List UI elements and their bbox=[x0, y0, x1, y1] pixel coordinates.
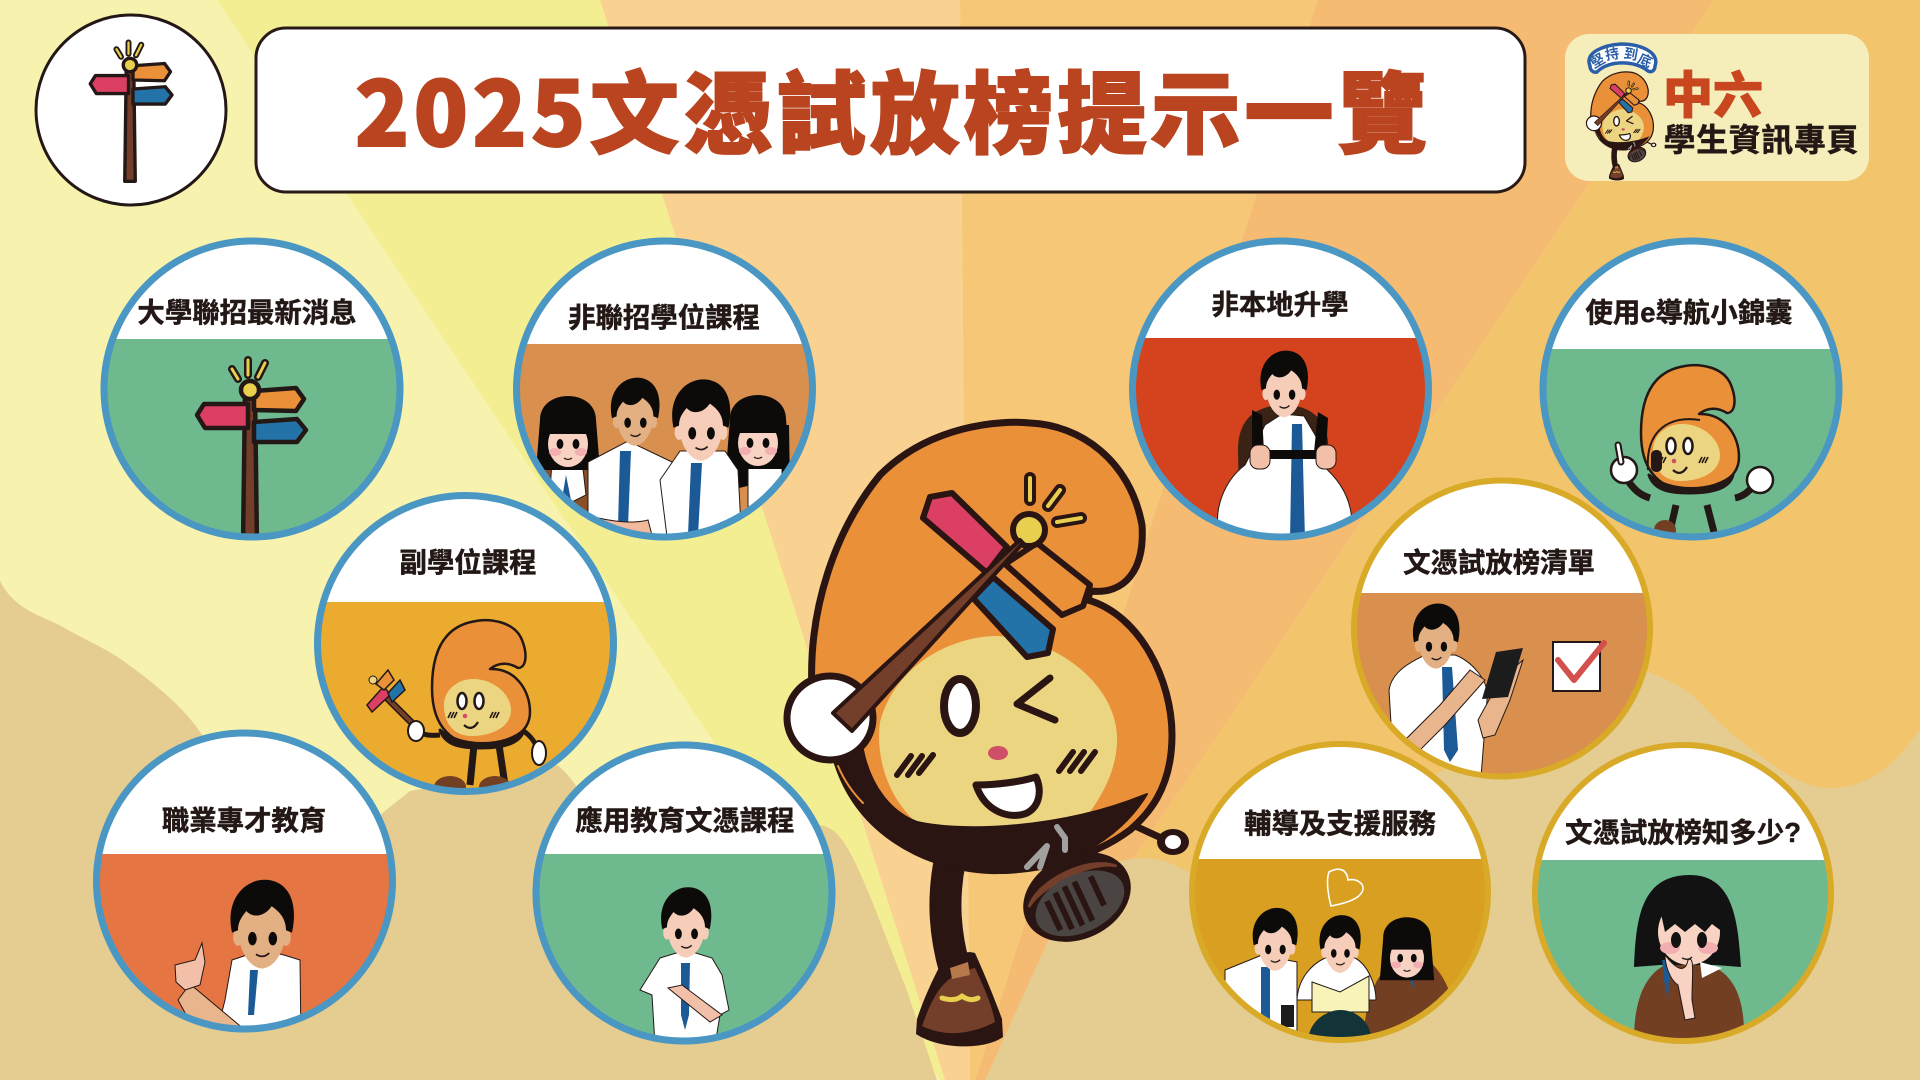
badge: 堅持到底: 持 bbox=[1604, 43, 1621, 65]
panel: 文憑試放榜清單 bbox=[1351, 478, 1653, 780]
heading: 非本地升學 bbox=[1212, 289, 1348, 320]
icon: signpost badge bbox=[36, 15, 226, 205]
panel: 應用教育文憑課程 bbox=[525, 745, 855, 1054]
heading: 副學位課程 bbox=[400, 547, 536, 578]
icon: checkbox bbox=[1553, 642, 1604, 691]
figure: mascot with headset bbox=[1611, 365, 1773, 540]
panel: 職業專才教育 bbox=[93, 730, 396, 1032]
icon: heart bbox=[1328, 869, 1363, 906]
heading: 文憑試放榜清單 bbox=[1403, 547, 1595, 578]
panel: 輔導及支援服務 bbox=[1185, 744, 1515, 1049]
figure: student with hand on chest bbox=[640, 887, 729, 1045]
panel: 非聯招學位課程 bbox=[513, 238, 816, 540]
figure: mascot with signpost bbox=[367, 620, 546, 798]
heading: 應用教育文憑課程 bbox=[575, 805, 795, 836]
badge: 堅持到底: 堅 bbox=[1586, 49, 1609, 73]
logo panel: 中六學生資訊專頁 bbox=[1565, 34, 1869, 181]
panel: 副學位課程 bbox=[310, 496, 640, 802]
mascot: orange character with signpost bbox=[787, 422, 1189, 1046]
heading: 職業專才教育 bbox=[162, 805, 326, 836]
panel: 文憑試放榜知多少? bbox=[1525, 745, 1855, 1050]
figure: student thumbs up bbox=[175, 880, 301, 1040]
figure: four students bbox=[536, 378, 790, 545]
heading: 大學聯招最新消息 bbox=[137, 297, 357, 328]
中六: 中六 bbox=[1663, 56, 1763, 128]
heading: 非聯招學位課程 bbox=[568, 302, 760, 333]
heading: 輔導及支援服務 bbox=[1244, 808, 1436, 839]
badge: 堅持到底: 到 bbox=[1622, 43, 1639, 65]
panel: 使用e導航小錦囊 bbox=[1530, 241, 1860, 549]
figure: student with backpack bbox=[1218, 351, 1352, 540]
panel: 大學聯招最新消息 bbox=[90, 241, 420, 549]
figure: student with tablet bbox=[1389, 604, 1523, 790]
figure: thinking girl bbox=[1634, 875, 1744, 1040]
heading: 使用e導航小錦囊 bbox=[1586, 297, 1792, 328]
學生資訊專頁: 學生資訊專頁 bbox=[1664, 115, 1858, 161]
badge: 堅持到底 bbox=[1586, 43, 1656, 73]
heading: 文憑試放榜知多少? bbox=[1565, 817, 1801, 848]
title banner bbox=[256, 28, 1525, 192]
panel: 非本地升學 bbox=[1120, 241, 1450, 548]
badge: 堅持到底: 底 bbox=[1635, 48, 1656, 72]
title: 2025文憑試放榜提示一覽 bbox=[355, 43, 1427, 172]
figure: three students with book bbox=[1225, 908, 1453, 1040]
